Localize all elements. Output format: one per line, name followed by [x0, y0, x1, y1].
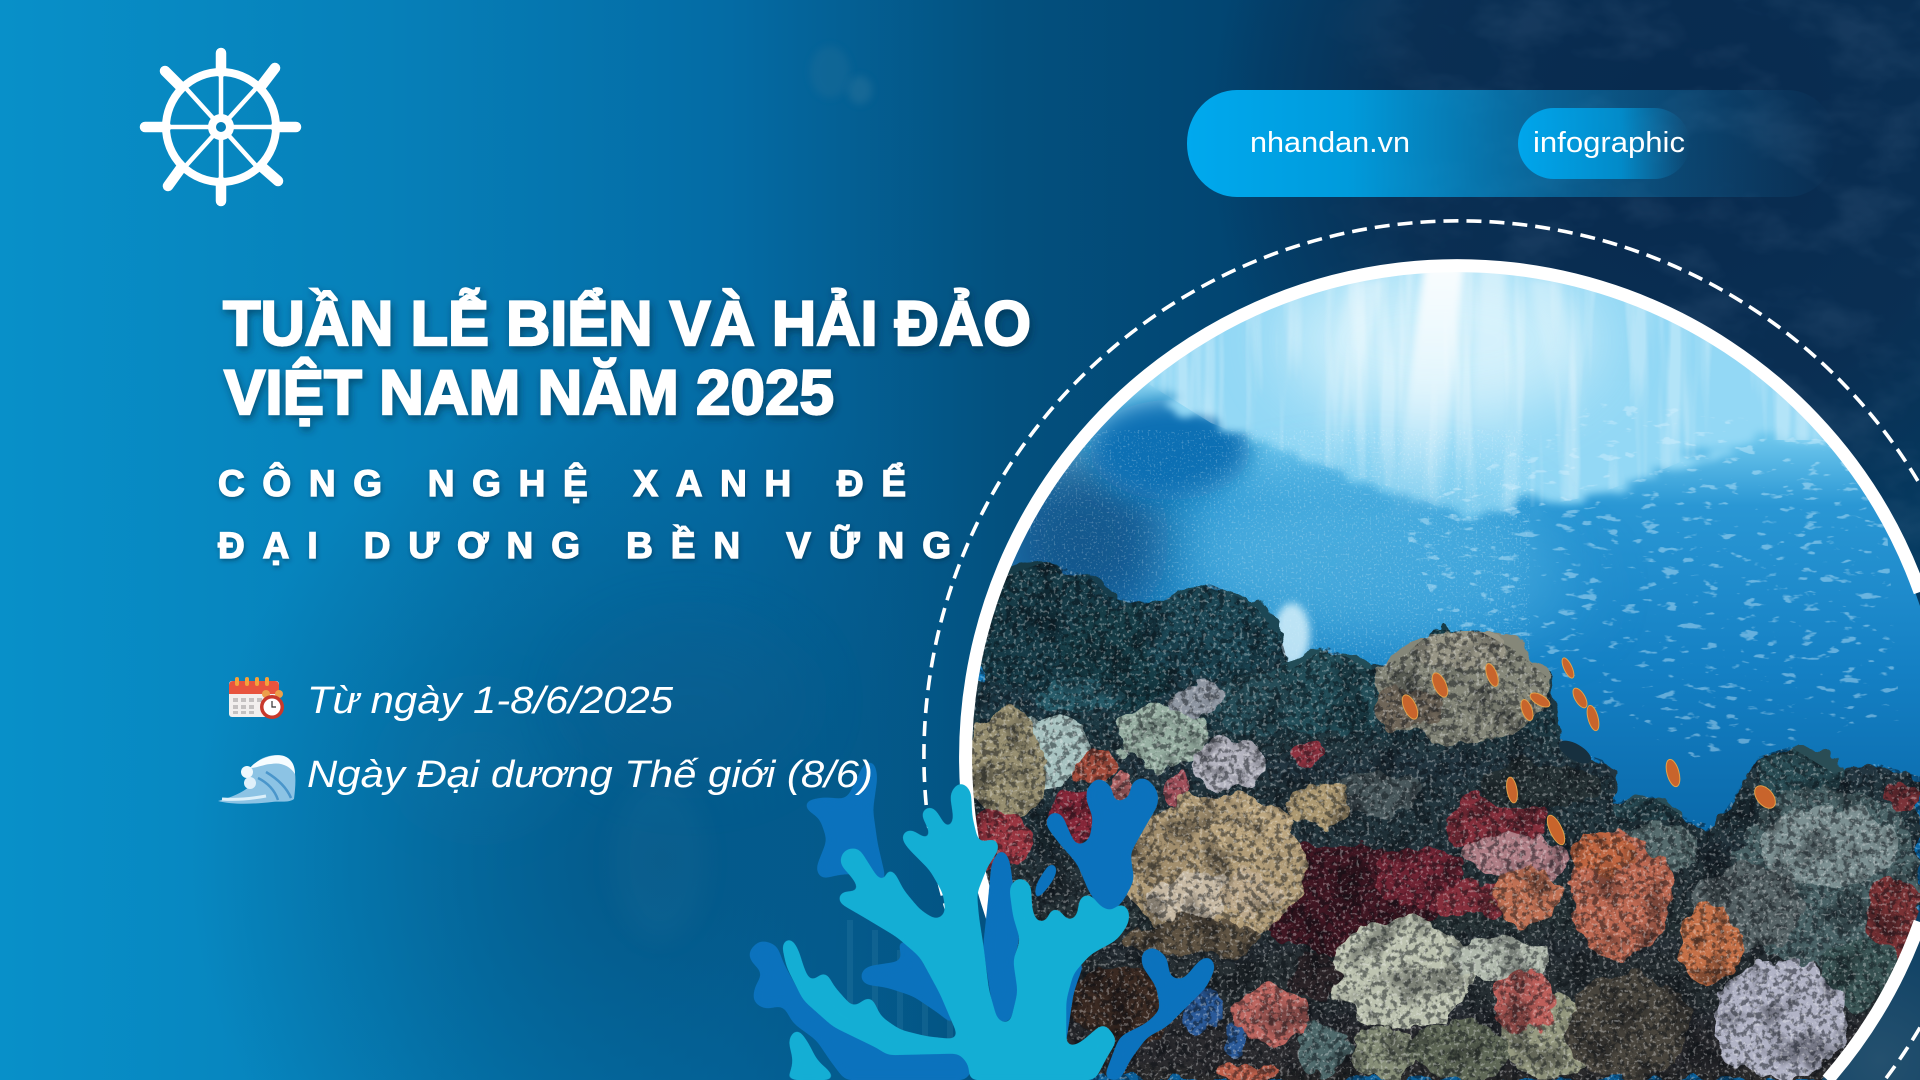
- haze: [1180, 475, 1540, 645]
- pale corals: [1028, 714, 1091, 790]
- icon: wave: [218, 755, 295, 804]
- title: TUẦN LỄ BIỂN VÀ HẢI ĐẢO: [223, 288, 1031, 359]
- coral: light blue branches: [765, 781, 1135, 1080]
- icon: ship wheel: [145, 53, 296, 201]
- dark water at left: [990, 450, 1170, 630]
- orange corals: [1496, 863, 1565, 927]
- title: [223, 288, 1031, 428]
- reef: [921, 562, 1920, 1080]
- water gradient: [978, 380, 1920, 1080]
- big tan coral: [1123, 793, 1304, 940]
- pill: nhandan.vn / infographic: [1187, 90, 1837, 197]
- top brown coral: [1378, 630, 1546, 743]
- right speckled rock: [1735, 783, 1920, 970]
- water glints: [1400, 400, 1900, 760]
- label: infographic: infographic: [1533, 127, 1685, 159]
- light rays: [1332, 272, 1570, 508]
- text: world ocean day: Ngày Đại dương Thế giới (8/6): [307, 754, 873, 796]
- illustration: blue coral: [748, 758, 1216, 1080]
- title: VIỆT NAM NĂM 2025: [224, 357, 834, 428]
- subtitle: [218, 462, 951, 566]
- icon: calendar with alarm clock: [229, 677, 284, 719]
- lower corals: [1332, 918, 1472, 1028]
- label: nhandan.vn: nhandan.vn: [1250, 127, 1410, 159]
- tag: infographic background: [1518, 108, 1690, 179]
- fish: [1399, 656, 1779, 847]
- coral: dark blue branches: [748, 758, 1216, 1080]
- panel: underwater reef photo in circle: [921, 250, 1920, 1080]
- tan left coral: [967, 710, 1044, 823]
- dark fish: [1559, 740, 1592, 764]
- tan small coral: [1286, 783, 1351, 824]
- subtitle: CÔNG NGHỆ XANH ĐỂ: [218, 462, 906, 504]
- reef texture: [960, 560, 1920, 1080]
- dashed circle outline: [924, 221, 1920, 1080]
- white ring of the photo circle: [966, 266, 1920, 1080]
- bright sky area: [1154, 272, 1827, 523]
- dark red centre: [1252, 843, 1440, 957]
- subtitle: ĐẠI DƯƠNG BỀN VỮNG: [218, 524, 951, 566]
- red corals: [968, 810, 1031, 870]
- text: date: Từ ngày 1-8/6/2025: [307, 680, 674, 722]
- dark blue rocks: [980, 560, 1045, 672]
